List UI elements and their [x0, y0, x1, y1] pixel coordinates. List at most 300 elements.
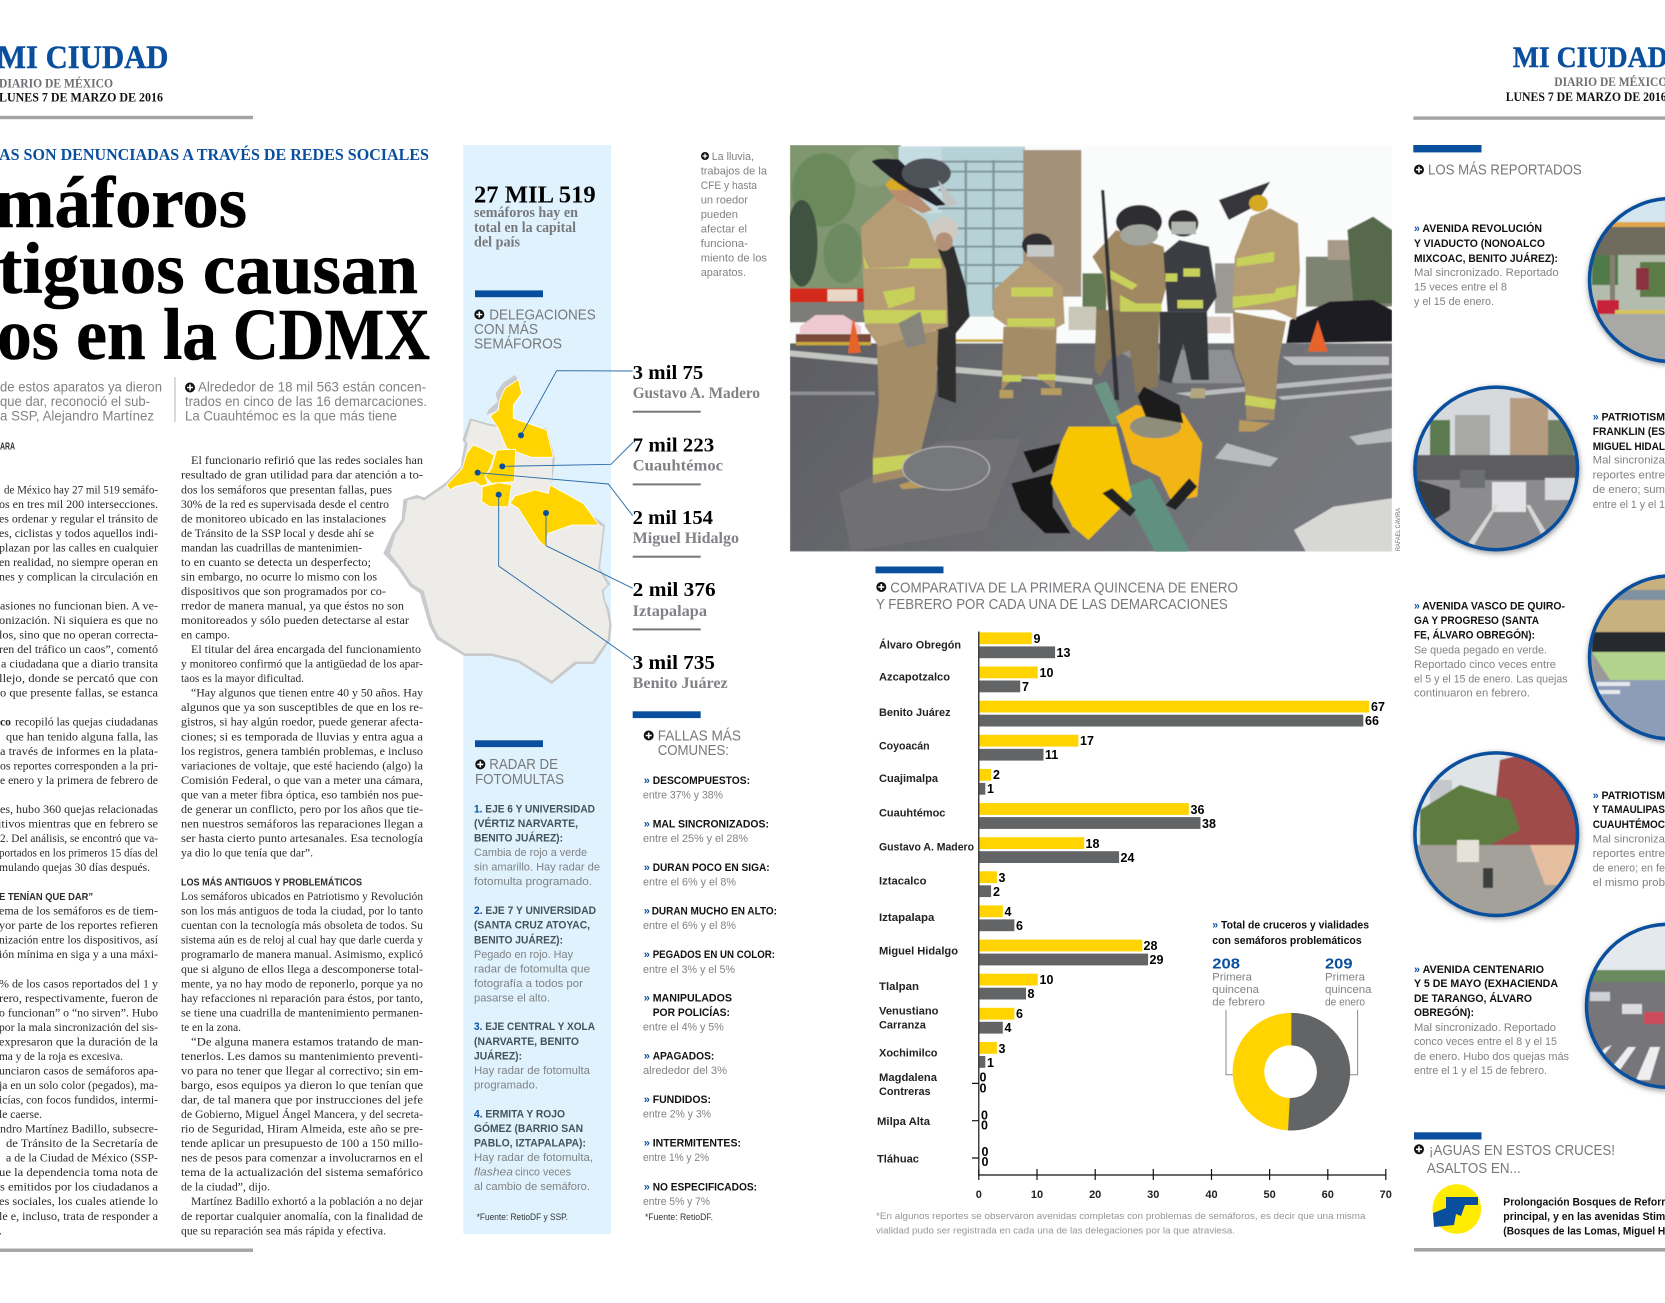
map: leader lines: [478, 371, 633, 660]
item: Avenida Centenario: Y 5 DE MAYO (EXHACIENDA: [1414, 978, 1558, 990]
body text column 2: ciones; si es temporada de lluvias y entra agua a: [181, 731, 423, 743]
chart: axis numbers: 20: [1089, 1189, 1101, 1201]
photo credit: RAFAEL CAVIRA: [1395, 507, 1402, 551]
body text column 1: s emitidos por los ciudadanos a: [0, 1182, 158, 1194]
chart: value labels: 13: [1056, 646, 1070, 660]
body text column 1: a de la Ciudad de México (SSP-: [6, 1153, 158, 1165]
panel: fallas más comunes: entre 37% y 38%: [643, 790, 723, 802]
deck: right: Alrededor de 18 mil 563 están concen-: [198, 379, 426, 395]
panel: fallas más comunes: »: [644, 862, 650, 874]
item: Vasco de Quiroga: Reportado cinco veces entre: [1414, 659, 1556, 671]
panel: fallas más comunes: entre 5% y 7%: [643, 1196, 710, 1208]
delegation figures: Iztapalapa: [633, 603, 707, 620]
body text column 1: nes y complican la circulación en: [0, 571, 158, 583]
item: Vasco de Quiroga: GA Y PROGRESO (SANTA: [1414, 615, 1539, 627]
body text column 1: nización entre los dispositivos, así: [0, 935, 159, 947]
heading: aguas en estos cruces: ASALTOS EN...: [1427, 1160, 1521, 1177]
panel: fallas más comunes: MAL SINCRONIZADOS:: [653, 818, 769, 830]
chart footnote: *En algunos reportes se observaron avenidas completas con problemas de semáforos, es decir que una misma: [876, 1211, 1366, 1222]
body text column 1: mulando quejas 30 días después.: [0, 862, 150, 874]
panel: fallas más comunes: PEGADOS EN UN COLOR:: [653, 949, 775, 961]
chart: gray bars January: [980, 646, 1363, 1068]
right page header: [1413, 41, 1665, 120]
main headline: [0, 162, 430, 375]
item: Vasco de Quiroga: » AVENIDA VASCO DE QUIRO-: [1414, 601, 1565, 613]
chart: axis numbers: 10: [1031, 1189, 1043, 1201]
body text column 1: recopiló las quejas ciudadanas: [15, 717, 159, 729]
circular photo 5: [1585, 922, 1665, 1092]
heading: delegaciones con más semáforos: [474, 290, 596, 352]
donut chart: total crossings: con semáforos problemáticos: [1212, 935, 1362, 947]
chart: delegation labels: Xochimilco: [879, 1048, 938, 1060]
panel: radar de fotomultas: FOTOMULTAS: [475, 771, 564, 788]
left page header: DIARIO DE MÉXICO: [0, 75, 113, 90]
item: Patriotismo y Tamaulipas: reportes entre: [1593, 848, 1665, 860]
body text column 2: variaciones de voltaje, que esté haciendo (algo) la: [181, 760, 423, 772]
chart heading: COMPARATIVA DE LA PRIMERA QUINCENA DE ENERO: [890, 580, 1238, 596]
map: northern sliver shadow: [487, 375, 518, 415]
delegation figures: 3 mil 735: [633, 652, 715, 674]
chart: value labels: 28: [1144, 939, 1157, 953]
body text column 2: bargo, esos equipos ya dieron lo que tenían que: [181, 1080, 423, 1092]
body text column 2: dar, de tal manera que por instrucciones del jefe: [181, 1094, 423, 1106]
item: Patriotismo y Franklin: reportes entre: [1593, 470, 1665, 482]
callout: assault locations: [1503, 1196, 1665, 1238]
deck: left: de estos aparatos ya dieron: [0, 379, 162, 395]
chart: value labels: 7: [1022, 680, 1029, 694]
body text column 1: ema de los semáforos es de tiem-: [0, 906, 158, 918]
chart: delegation labels: Contreras: [879, 1086, 931, 1098]
main headline: tiguos causan: [0, 228, 418, 309]
body text column 2: se tiene una cuadrilla de mantenimiento permanen-: [181, 1007, 423, 1019]
panel: fallas más comunes: *Fuente: RetioDF.: [645, 1212, 713, 1222]
body text column 2: que si alguno de ellos llega a descomponerse total-: [181, 964, 423, 976]
body text column 2: tende aplicar un presupuesto de 100 a 150 millo-: [181, 1138, 423, 1150]
photo: firefighter 6: [1219, 182, 1300, 432]
side caption: La lluvia,: [712, 151, 754, 163]
panel: fallas más comunes: entre 1% y 2%: [643, 1152, 709, 1164]
delegation figures: 2 mil 154: [633, 507, 713, 529]
body text column 2: sistema aún es de reloj al cual hay que darle cuerda y: [181, 935, 423, 947]
body text column 2: to en cuanto se detecta un desperfecto;: [181, 557, 371, 569]
donut chart: total crossings: de febrero: [1212, 996, 1265, 1008]
body text column 2: mandan las cuadrillas de mantenimien-: [181, 542, 362, 554]
chart: axis numbers: 30: [1147, 1189, 1159, 1201]
chart: value labels: 0: [981, 1108, 988, 1122]
chart: delegation labels: Azcapotzalco: [879, 672, 950, 684]
panel: fallas más comunes: »: [644, 949, 650, 961]
body text column 1: le e, incluso, trata de responder a: [0, 1211, 158, 1223]
body text column 2: los registros, genera también problemas, e incluso: [181, 746, 423, 758]
body text column 2: en campo.: [181, 630, 230, 642]
chart: value labels: 18: [1086, 837, 1099, 851]
photo: firefighter 5: [1160, 210, 1217, 398]
body text column 2: de Tránsito de la SSP local y desde ahí se: [181, 528, 374, 540]
panel: fallas más comunes: FALLAS MÁS: [658, 727, 741, 744]
panel: radar de fotomultas: programado.: [474, 1079, 538, 1091]
panel: fallas más comunes: DURAN MUCHO EN ALTO:: [652, 906, 777, 918]
photo: firefighter 1: [861, 158, 958, 489]
map: yellow delegations: [447, 379, 599, 547]
panel: fallas más comunes: entre el 6% y el 8%: [643, 877, 736, 889]
stat: 27 mil 519: total en la capital: [474, 220, 576, 236]
item: Vasco de Quiroga: [1414, 601, 1568, 700]
body text column 2: de la ciudad”, dijo.: [181, 1182, 270, 1194]
donut chart: total crossings: Primera: [1325, 972, 1366, 984]
panel: radar de fotomultas: pasarse el alto.: [474, 992, 550, 1004]
item: Avenida Revolución: MIXCOAC, BENITO JUÁREZ):: [1414, 252, 1558, 265]
chart: delegation labels: Iztapalapa: [879, 912, 935, 924]
body text column 1: llejo, donde se percató que con: [0, 673, 158, 685]
body text column 2: tenerlos. Les damos su mantenimiento preventi-: [181, 1051, 423, 1063]
panel: fallas más comunes: MANIPULADOS: [653, 992, 732, 1004]
chart: delegation labels: Benito Juárez: [879, 707, 951, 719]
delegation figures: Benito Juárez: [633, 675, 728, 692]
panel: radar de fotomultas: *Fuente: RetioDF y SSP.: [477, 1212, 568, 1222]
chart: value labels: 6: [1016, 919, 1023, 933]
chart: delegation labels: Coyoacán: [879, 740, 930, 752]
delegation figures: [633, 362, 760, 692]
heading: aguas en estos cruces: ¡AGUAS EN ESTOS CRUCES!: [1429, 1142, 1615, 1159]
body text column 1: ndro Martínez Badillo, subsecre-: [0, 1124, 158, 1136]
item: Vasco de Quiroga: Se queda pegado en verde.: [1414, 644, 1547, 656]
body text column 1: co: [0, 717, 11, 729]
item: Avenida Centenario: entre el 1 y el 15 de febrero.: [1414, 1065, 1547, 1077]
body text column 1: es sociales, los cuales atiende lo: [0, 1196, 158, 1208]
heading: delegaciones con más semáforos: DELEGACIONES: [489, 306, 596, 323]
item: Patriotismo y Tamaulipas: Mal sincroniza: [1593, 834, 1665, 846]
body text column 2: Los semáforos ubicados en Patriotismo y Revolución: [181, 891, 423, 903]
body text column 2: hay refacciones ni reparación para éstos, por tanto,: [181, 993, 423, 1005]
body text column 2: de Gobierno, Miguel Ángel Mancera, y del secreta-: [181, 1109, 423, 1121]
panel: radar de fotomultas: fotografía a todos por: [474, 978, 583, 990]
chart: axis numbers: [976, 1189, 1392, 1201]
body text column 2: dos los semáforos que presentan fallas, pues: [181, 484, 393, 496]
item: Avenida Revolución: y el 15 de enero.: [1414, 296, 1494, 308]
heading: los más reportados: LOS MÁS REPORTADOS: [1428, 161, 1582, 178]
item: Avenida Revolución: Y VIADUCTO (NONOALCO: [1414, 238, 1545, 250]
body text column 1: es, ciclistas y todos aquellos indi-: [0, 528, 158, 540]
left page header: [0, 40, 253, 119]
main headline: os en la: [0, 294, 217, 375]
stat: 27 mil 519: 27 MIL 519: [474, 182, 596, 209]
item: Patriotismo y Franklin: Mal sincroniza: [1593, 455, 1665, 467]
side caption: miento de los: [701, 252, 767, 264]
photo: firefighter 2 dark: [930, 217, 970, 403]
delegation figures: 3 mil 75: [633, 362, 703, 384]
panel: radar de fotomultas: (SANTA CRUZ ATOYAC,: [474, 920, 590, 932]
panel: fallas más comunes: entre el 3% y el 5%: [643, 964, 735, 976]
donut chart: total crossings: quincena: [1325, 984, 1372, 996]
panel: fallas más comunes: »: [644, 906, 650, 918]
chart: value labels: 38: [1202, 817, 1216, 831]
photo: fallen traffic light: [1011, 387, 1202, 540]
body text column 2: gistros, si hay algún roedor, puede generar afecta-: [181, 717, 423, 729]
side caption: funciona-: [701, 238, 748, 250]
chart: delegation labels: Venustiano: [879, 1006, 939, 1018]
panel: fallas más comunes: DESCOMPUESTOS:: [653, 775, 750, 787]
chart: yellow bars February: [980, 632, 1369, 1054]
panel: radar de fotomultas: fotomulta programado.: [474, 876, 592, 888]
chart: value labels: 4: [1004, 905, 1012, 919]
body text column 2: de generar un conflicto, pero por los años que tie-: [181, 804, 423, 816]
kicker: AS SON DENUNCIADAS A TRAVÉS DE REDES SOCIALES: [0, 145, 429, 164]
chart: value labels: 3: [998, 871, 1006, 885]
panel: radar de fotomultas: 1. EJE 6 Y UNIVERSIDAD: [474, 804, 595, 816]
chart: value labels: 66: [1365, 714, 1379, 728]
side caption: CFE y hasta: [701, 180, 758, 192]
body text column 1: en realidad, no siempre operan en: [0, 557, 158, 569]
chart: value labels: 36: [1190, 803, 1204, 817]
body text column 1: onización. Ni siquiera es que no: [0, 615, 158, 627]
body text column 1: de Tránsito de la Secretaría de: [6, 1138, 158, 1150]
panel: radar de fotomultas: BENITO JUÁREZ):: [474, 832, 563, 845]
circular photo 1: [1585, 195, 1665, 365]
body text column 2: Martínez Badillo exhortó a la población a no dejar: [191, 1196, 423, 1208]
body text column 2: “De alguna manera estamos tratando de man-: [191, 1036, 423, 1048]
panel: radar de fotomultas: 3. EJE CENTRAL Y XOLA: [474, 1021, 595, 1033]
body text column 2: El titular del área encargada del funcionamiento: [191, 644, 421, 656]
photo road: [790, 334, 1392, 552]
body text column 2: de monitoreo ubicado en las instalaciones: [181, 513, 387, 525]
body text column 1: es ordenar y regular el tránsito de: [0, 513, 158, 525]
body text column 1: o funcionan” o “no sirven”. Hubo: [0, 1007, 158, 1019]
panel: fallas más comunes: [633, 711, 777, 1222]
chart: axis numbers: 70: [1380, 1189, 1392, 1201]
photo: fallen pole: [790, 353, 1175, 557]
body text column 2: Comisión Federal, o que van a meter una cámara,: [181, 775, 423, 787]
item: Patriotismo y Tamaulipas: [1593, 790, 1665, 889]
chart: delegation labels: Gustavo A. Madero: [879, 842, 974, 854]
body text column 1: o que presente fallas, se estanca: [0, 688, 158, 700]
panel: radar de fotomultas: 2. EJE 7 Y UNIVERSIDAD: [474, 905, 596, 917]
left page header: MI CIUDAD: [0, 40, 168, 76]
stat: 27 mil 519: del país: [474, 234, 520, 250]
panel: fallas más comunes: APAGADOS:: [653, 1050, 714, 1062]
chart: value labels: 0: [981, 1118, 988, 1132]
body text column 2: nen nuestros semáforos las reparaciones llegan a: [181, 818, 423, 830]
chart: value labels: 2: [993, 768, 1000, 782]
panel: radar de fotomultas: Hay radar de fotomulta,: [474, 1152, 593, 1164]
body text column 2: de reportar cualquier anomalía, con la finalidad de: [181, 1211, 423, 1223]
panel: fallas más comunes: »: [644, 1050, 650, 1062]
heading: aguas en estos cruces: [1414, 1132, 1615, 1177]
item: Avenida Centenario: OBREGÓN):: [1414, 1006, 1474, 1019]
body text column 1: ión mínima en siga y a una máxi-: [0, 949, 158, 961]
item: Patriotismo y Tamaulipas: el mismo prob: [1593, 877, 1665, 889]
chart: delegation labels: Carranza: [879, 1019, 927, 1031]
donut chart: total crossings: quincena: [1212, 984, 1260, 996]
body text column 1: E TENÍAN QUE DAR”: [0, 890, 93, 903]
body text column 1: ARA: [0, 442, 15, 453]
panel: fallas más comunes: alrededor del 3%: [643, 1065, 727, 1077]
deck: right: trados en cinco de las 16 demarcaciones.: [185, 393, 427, 409]
panel: radar de fotomultas: (NARVARTE, BENITO: [474, 1036, 579, 1048]
body text column 1: los, sino que no operan correcta-: [0, 630, 158, 642]
chart: delegation labels: Tlalpan: [879, 981, 919, 993]
body text column 1: a ciudadana que a diario transita: [1, 659, 158, 671]
chart: delegation labels: Miguel Hidalgo: [879, 946, 958, 958]
panel: fallas más comunes: »: [644, 1138, 650, 1150]
map: land surface: [390, 421, 609, 681]
panel: radar de fotomultas: Hay radar de fotomulta: [474, 1065, 591, 1077]
panel: radar de fotomultas: radar de fotomulta que: [474, 963, 590, 975]
body text column 2: LOS MÁS ANTIGUOS Y PROBLEMÁTICOS: [181, 876, 362, 889]
panel: radar de fotomultas: Pegado en rojo. Hay: [474, 949, 573, 961]
panel: radar de fotomultas: BENITO JUÁREZ):: [474, 933, 563, 946]
chart: value labels: 0: [980, 1071, 986, 1085]
photo background: trees: [786, 145, 901, 305]
body text column 2: “Hay algunos que tienen entre 40 y 50 años. Hay: [191, 688, 423, 700]
body text column 2: mente, ya no hay modo de reponerlo, porque ya no: [181, 978, 423, 990]
body text column 2: que van a meter fibra óptica, eso también nos pue-: [181, 789, 423, 801]
item: Avenida Centenario: conco veces entre el 8 y el 15: [1414, 1036, 1557, 1048]
panel: radar de fotomultas: flashea: [474, 1167, 513, 1179]
body text column 2: rio de Seguridad, Hiram Almeida, este año se pre-: [181, 1124, 423, 1136]
panel: radar de fotomultas: JUÁREZ):: [474, 1049, 522, 1062]
body text column 2: son los más antiguos de toda la ciudad, por lo tanto: [181, 906, 423, 918]
panel: comparative bar chart: [876, 566, 1392, 1236]
panel: fallas más comunes: NO ESPECIFICADOS:: [653, 1181, 757, 1193]
panel: radar de fotomultas: RADAR DE: [489, 756, 558, 773]
body text column 1: unciaron casos de semáforos apa-: [0, 1066, 158, 1078]
body text column 1: le caerse.: [0, 1109, 42, 1121]
chart: delegation labels: Magdalena: [879, 1072, 938, 1084]
panel: radar de fotomultas: al cambio de semáforo.: [474, 1181, 590, 1193]
body text column 1: 2. Del análisis, se encontró que va-: [0, 833, 158, 845]
side caption: un roedor: [701, 194, 748, 206]
chart: value labels: 10: [1040, 973, 1053, 987]
chart footnote: vialidad pudo ser registrada en cada una de las delegaciones por la que atraviesa.: [876, 1226, 1235, 1236]
chart: delegation labels: Milpa Alta: [877, 1116, 931, 1128]
right page bottom rule: [1414, 1248, 1665, 1252]
map: land shadow edge: [383, 418, 612, 684]
body text column 2: cuentan con la tecnología más obsoleta de todos. Su: [181, 920, 423, 932]
body text column 1: os reportes corresponden a la pri-: [0, 760, 158, 772]
body text column 1: a través de informes en la plata-: [0, 746, 158, 758]
donut chart: total crossings: [1212, 920, 1372, 1130]
donut chart: total crossings: » Total de cruceros y vialidades: [1212, 920, 1369, 932]
deck: left: a SSP, Alejandro Martínez: [0, 408, 154, 424]
panel: fallas más comunes: »: [644, 1181, 650, 1193]
body text column 1: portados en los primeros 15 días del: [0, 848, 158, 860]
photo: manhole: [903, 447, 990, 490]
body text column 2: algunos que ya son susceptibles de que en los re-: [181, 702, 423, 714]
stat: 27 mil 519: semáforos hay en: [474, 205, 579, 221]
item: Avenida Centenario: » AVENIDA CENTENARIO: [1414, 964, 1544, 976]
photo: firefighter 3: [994, 233, 1065, 398]
item: Avenida Revolución: Mal sincronizado. Reportado: [1414, 267, 1559, 279]
body text column 1: ue la dependencia toma nota de: [0, 1167, 158, 1179]
panel: fallas más comunes: entre el 4% y 5%: [643, 1021, 724, 1033]
body text column 1: de México hay 27 mil 519 semáfo-: [4, 484, 158, 496]
body text column 2: resultado de gran utilidad para dar atención a to-: [181, 470, 423, 482]
panel: radar de fotomultas: 4. ERMITA Y ROJO: [474, 1108, 565, 1120]
chart: delegation labels: Cuajimalpa: [879, 773, 939, 785]
deck: left: que dar, reconoció el sub-: [0, 393, 150, 409]
heading: delegaciones con más semáforos: CON MÁS: [474, 321, 538, 338]
circular photo 4: [1413, 750, 1580, 920]
panel: radar de fotomultas: sin amarillo. Hay radar de: [474, 862, 600, 874]
heading: delegaciones con más semáforos: SEMÁFOROS: [474, 336, 562, 352]
chart heading: Y FEBRERO POR CADA UNA DE LAS DEMARCACIONES: [876, 596, 1228, 613]
panel: fallas más comunes: entre el 6% y el 8%: [643, 920, 736, 932]
chart: value labels: 9: [1034, 632, 1040, 646]
body text column 2: y monitoreo confirmó que la antigüedad de los apar-: [181, 659, 423, 671]
body text column 1: ren del tráfico un caos”, comentó: [0, 644, 158, 656]
body text column 1: itivos mientras que en febrero se: [0, 818, 158, 830]
body text column 1: expresaron que la duración de la: [0, 1036, 158, 1048]
panel: radar de fotomultas: GÓMEZ (BARRIO SAN: [474, 1122, 583, 1135]
body text column 1: yor parte de los reportes refieren: [0, 920, 158, 932]
photo: firefighter 4: [1092, 190, 1168, 400]
body text column 2: taos es la mayor dificultad.: [181, 673, 304, 685]
side caption: [701, 151, 768, 279]
side caption: trabajos de la: [701, 165, 768, 177]
deck: right: [174, 377, 427, 424]
panel: light blue sidebar: [463, 145, 611, 1234]
chart: value labels: 6: [1016, 1007, 1023, 1021]
item: Patriotismo y Franklin: [1593, 412, 1665, 511]
panel: radar de fotomultas: PABLO, IZTAPALAPA):: [474, 1138, 586, 1150]
side caption: pueden: [701, 209, 738, 221]
panel: fallas más comunes: DURAN POCO EN SIGA:: [653, 862, 770, 874]
icon: gun in yellow circle: [1432, 1184, 1481, 1234]
item: Avenida Centenario: de enero. Hubo dos quejas más: [1414, 1051, 1569, 1063]
body text column 2: El funcionario refirió que las redes sociales han: [191, 455, 423, 467]
panel: fallas más comunes: entre 2% y 3%: [643, 1109, 711, 1121]
body text column 1: asiones no funcionan bien. A ve-: [0, 600, 158, 612]
circular photo 2: [1413, 385, 1580, 555]
deck: right: La Cuauhtémoc es la que más tiene: [185, 408, 397, 424]
item: Patriotismo y Tamaulipas: de enero; en fe: [1593, 863, 1665, 875]
chart: value labels: 2: [993, 885, 1000, 899]
photo: cones: [848, 317, 1328, 353]
chart: value labels: 1: [987, 782, 994, 796]
body text column 2: nes de pesos para comenzar a involucrarnos en el: [181, 1153, 423, 1165]
chart: delegation labels: Tláhuac: [877, 1153, 919, 1165]
item: Avenida Centenario: [1414, 964, 1569, 1077]
body text column 1: plazan por las calles en cualquier: [0, 542, 158, 554]
body text column 1: % de los casos reportados del 1 y: [0, 978, 158, 990]
panel: fallas más comunes: FUNDIDOS:: [653, 1094, 711, 1106]
body text column 2: 30% de la red es supervisada desde el centro: [181, 499, 389, 511]
stat: 27 mil 519: [474, 182, 596, 250]
chart: value labels: 3: [998, 1042, 1006, 1056]
item: Vasco de Quiroga: FE, ÁLVARO OBREGÓN):: [1414, 629, 1535, 642]
body text column 1: ma y de la roja es excesiva.: [0, 1051, 123, 1063]
chart: value labels: 17: [1080, 734, 1094, 748]
delegation figures: Cuauhtémoc: [633, 458, 723, 475]
donut chart: total crossings: de enero: [1325, 996, 1365, 1008]
panel: fallas más comunes: »: [644, 775, 650, 787]
chart: value labels: 0: [982, 1145, 988, 1159]
chart: value labels: 1: [987, 1056, 994, 1070]
panel: fallas más comunes: COMUNES:: [658, 742, 729, 759]
panel: radar de fotomultas: (VÉRTIZ NARVARTE,: [474, 817, 578, 830]
body text column 2: vo para no tener que llegar al correctivo; sin em-: [181, 1066, 423, 1078]
body text column 2: rredor de manera manual, ya que éstos no son: [181, 600, 404, 612]
body text column 1: por la mala sincronización del sis-: [0, 1022, 158, 1034]
chart: value labels: 29: [1150, 953, 1163, 967]
body text column 2: ser hasta cierto punto artesanales. Esa tecnología: [181, 833, 423, 845]
body text column 2: programarlo de manera manual. Asimismo, explicó: [181, 949, 423, 961]
chart: value labels: 8: [1028, 987, 1034, 1001]
item: Vasco de Quiroga: el 5 y el 15 de enero. Las quejas: [1414, 673, 1568, 685]
photo: firefighters and fallen traffic light: [786, 145, 1392, 557]
body text column 1: ja en un solo color (pegados), ma-: [0, 1080, 158, 1092]
donut chart: total crossings: 208: [1212, 956, 1240, 972]
